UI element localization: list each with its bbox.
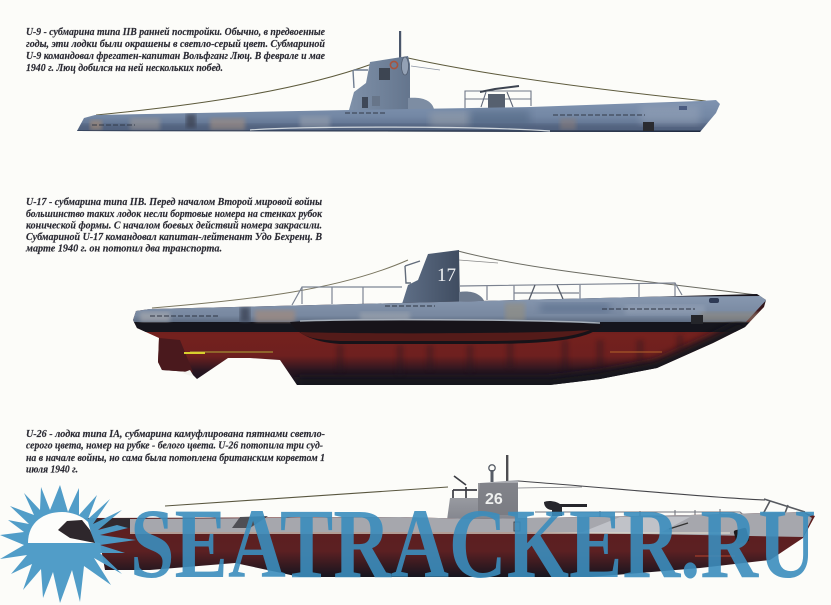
text block: U-9 [26, 27, 326, 74]
wires [165, 487, 448, 506]
hull [58, 512, 815, 577]
white dome of the sun [28, 512, 94, 543]
wires [152, 260, 408, 308]
bow cutter [762, 499, 805, 516]
weathering [70, 105, 720, 132]
hull [133, 294, 766, 385]
mast [399, 31, 401, 58]
text block: U-26: июля 1940 г. [26, 464, 78, 476]
bridge frame [405, 261, 420, 283]
railings [535, 509, 745, 518]
deck gun [544, 501, 587, 516]
AA gun and bridge rail [453, 476, 477, 500]
marks [92, 113, 645, 125]
text block: U-9: 1940 г. Люц добился на ней нескольких побед. [26, 63, 223, 74]
marks [733, 527, 750, 544]
stern of hull showing through [58, 520, 95, 543]
text block: U-26 [26, 429, 325, 476]
text block: U-9: годы, эти лодки были окрашены в светло-серый цвет. Субмариной [26, 39, 325, 50]
mast and periscope ring [506, 455, 508, 481]
conning tower [402, 250, 460, 304]
submarine U-26 [58, 455, 815, 577]
text block: U-17 [25, 197, 323, 254]
sun rays [0, 485, 136, 603]
text block: U-17: U-17 - субмарина типа IIB. Перед началом Второй мировой войны [26, 197, 322, 208]
text block: U-26: на в начале войны, но сама была потоплена британским корветом 1 [26, 453, 325, 464]
number 26: 26 [485, 491, 503, 508]
text block: U-9: U-9 командовал фрегатен-капитан Вольфганг Люц. В феврале и мае [26, 51, 326, 62]
gun and rail [465, 91, 531, 108]
submarine U-17 [130, 250, 770, 385]
grey upper hull [130, 512, 812, 537]
text block: U-17: большинство таких лодок несли бортовые номера на стенках рубок [26, 209, 323, 220]
hull [77, 100, 720, 132]
text block: U-17: марте 1940 г. он потопил два транспорта. [25, 244, 222, 254]
text block: U-26: серого цвета, номер на рубке - белого цвета. U-26 потопила три суд- [26, 440, 323, 452]
marks [150, 306, 695, 316]
watermark logo: sun [0, 485, 136, 603]
text block: U-9: U-9 - субмарина типа IIB ранней постройки. Обычно, в предвоенные [26, 27, 326, 38]
text block: U-26: U-26 - лодка типа IA, субмарина камуфлирована пятнами светло- [26, 429, 325, 440]
conning tower [447, 480, 518, 520]
conning tower [349, 56, 410, 110]
saddle tank line [250, 127, 550, 131]
rudder and stern planes [158, 338, 193, 372]
bridge frame [353, 70, 368, 88]
upper grey hull and weathering [130, 296, 770, 385]
railings [292, 287, 402, 305]
saddle tank [290, 319, 603, 344]
text block: U-17: конической формы. С началом боевых действий номера закрасили. [26, 220, 322, 232]
text block: U-17: Субмариной U-17 командовал капитан-лейтенант Удо Бехренц. В [26, 232, 322, 243]
wires [96, 64, 372, 115]
number 17: 17 [437, 265, 456, 286]
submarine U-9 [70, 31, 720, 132]
